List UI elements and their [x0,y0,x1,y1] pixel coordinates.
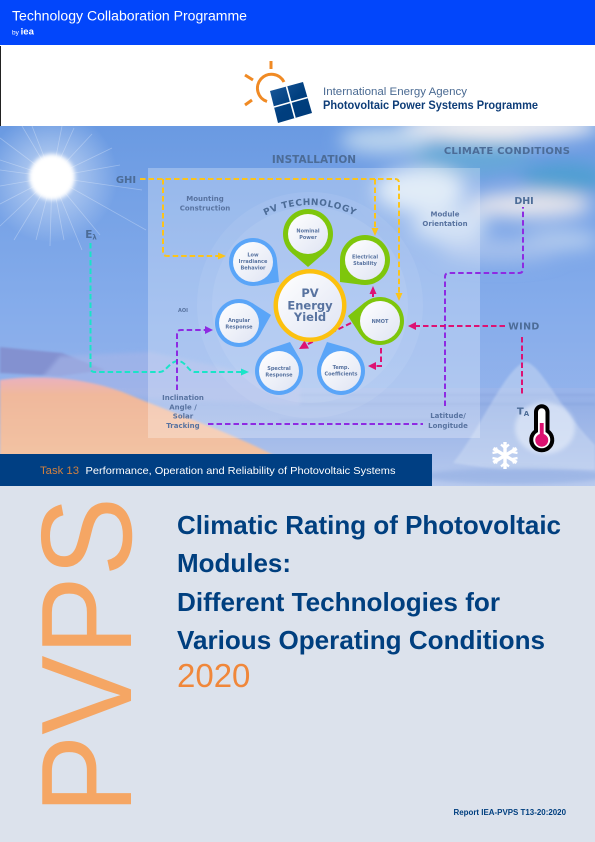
bubble: spectral response: Spectral [267,366,291,372]
bubble: electrical stability: Stability [353,261,378,267]
bubble: electrical stability [340,235,390,285]
sun [0,126,146,250]
sea [240,430,595,486]
logo text: International Energy Agency [323,86,468,98]
task bar: Task 13 [40,465,79,477]
label: E lambda: E [85,229,92,241]
arrows: purple [177,207,523,424]
panel: installation [148,168,480,438]
central bubble: PV energy yield [274,269,346,342]
label: TA: T [517,406,524,418]
label: inclination angle: Angle / [169,404,197,412]
bubble: angular response: Angular [228,318,251,324]
report title: Climatic Rating of Photovoltaic [177,510,561,540]
label: latitude longitude: Longitude [428,422,468,430]
bubble: low irradiance behavior: Behavior [240,266,266,272]
bubble: low irradiance behavior: Irradiance [239,259,268,265]
logo: sun and solar panel [245,61,312,123]
logo text [323,86,538,112]
heading: installation: INSTALLATION [272,154,356,166]
watermark: PVPS: PVPS [15,497,159,814]
mountain [0,347,105,376]
bubble: spectral response [255,342,303,395]
central bubble: PV energy yield: Energy [287,298,333,312]
arrow: teal spectral [90,243,249,376]
label: E lambda: λ [92,234,97,242]
heading: pv technology: PV TECHNOLOGY [263,198,357,215]
bubble: nominal power [283,209,333,267]
bubble: electrical stability: Electrical [352,254,378,260]
label: mounting construction: Construction [180,204,230,212]
bubble: temperature coefficients [317,342,365,395]
bubble: low irradiance behavior: Low [247,252,259,258]
bubble: spectral response: Response [265,372,293,378]
heading: climate conditions: CLIMATE CONDITIONS [444,146,570,157]
photo background: sun, clouds, dunes and ice [0,111,595,486]
report title: Various Operating Conditions [177,625,545,655]
bubble: NMOT: NMOT [372,319,389,325]
label: inclination angle: Inclination [162,394,204,402]
bubble: angular response: Response [225,324,253,330]
logo text: Photovoltaic Power Systems Programme [323,100,538,112]
icon: thermometer [531,406,552,450]
header band [0,0,595,45]
report number: Report IEA-PVPS T13-20:2020 [454,808,567,817]
central bubble: PV energy yield: PV [301,286,319,300]
bubble: temperature coefficients: Coefficients [324,372,358,378]
label: wind: WIND [508,322,540,332]
report title: Different Technologies for [177,587,500,617]
arrows: magenta [299,286,522,395]
label: TA: A [524,410,530,418]
label: GHI: GHI [116,175,136,186]
pv technology rings [197,192,423,418]
icon: snowflake [492,442,518,469]
logo band [0,45,595,126]
bubble: nominal power: Nominal [296,228,320,234]
sand [0,376,274,454]
report year: 2020 [177,657,250,694]
header by iea: by iea [12,26,35,38]
task bar [0,454,432,486]
label: latitude longitude: Latitude/ [430,412,466,420]
bubble: NMOT [348,297,404,345]
bubble: low irradiance behavior [229,238,279,286]
header title: Technology Collaboration Programme [12,8,247,24]
arrows: yellow GHI [140,179,402,301]
ice hill [453,362,595,470]
bubble: nominal power: Power [299,235,317,241]
label: DHI: DHI [514,196,534,207]
label: inclination angle: Solar [173,412,194,420]
report title [177,510,561,655]
label: mounting construction: Mounting [186,195,224,203]
bubble: angular response [215,299,271,347]
label: module orientation: Module [431,210,460,218]
clouds [340,112,595,262]
central bubble: PV energy yield: Yield [293,310,326,324]
report title: Modules: [177,548,291,578]
bubble: temperature coefficients: Temp. [333,365,350,371]
label: inclination angle: Tracking [166,422,200,430]
label: module orientation: Orientation [422,220,468,228]
label: AOI: AOI [178,308,188,314]
task bar: Performance, Operation and Reliability of Photovoltaic Systems [86,465,396,477]
